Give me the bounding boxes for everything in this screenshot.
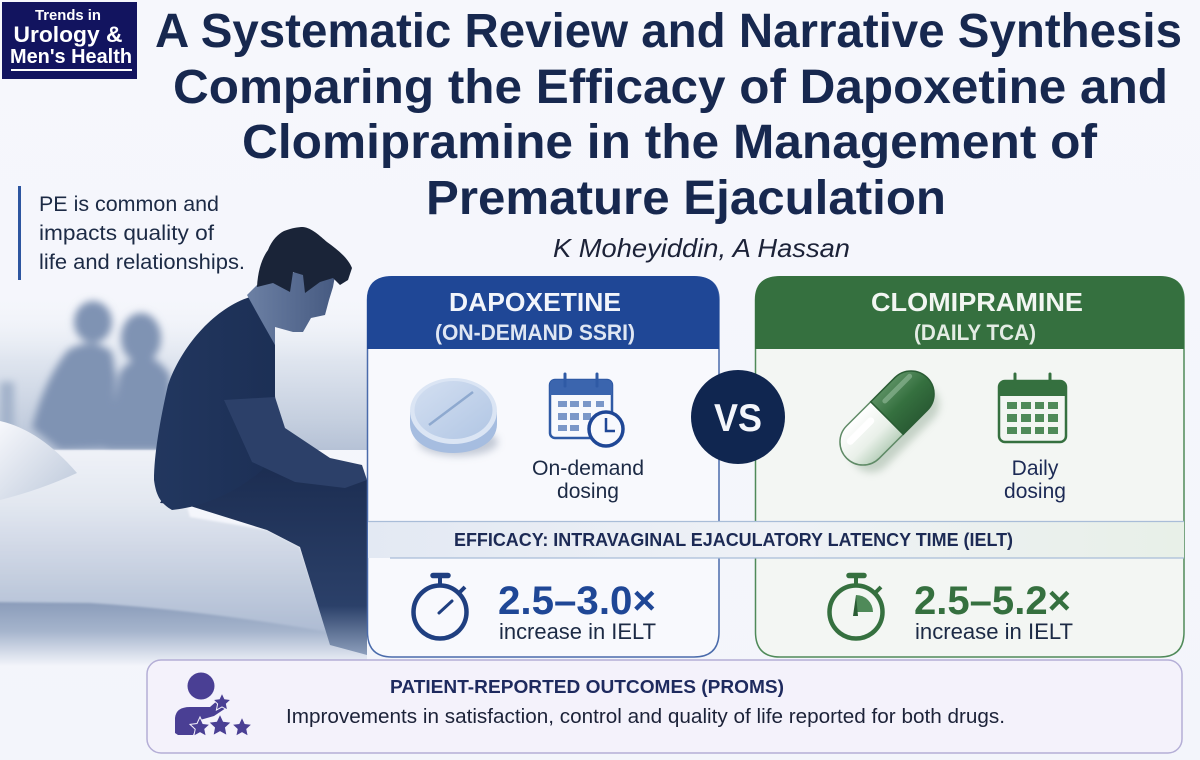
dapoxetine efficacy result — [414, 576, 656, 644]
title: Comparing the Efficacy of Dapoxetine and — [173, 61, 1168, 114]
header: dapoxetine — [367, 276, 719, 349]
label: daily dosing: dosing — [1004, 480, 1066, 503]
panel: patient-reported outcomes: Improvements in satisfaction, control and quality of life reported for both drugs. — [286, 706, 1005, 728]
vs badge: VS — [714, 397, 762, 440]
clomipramine efficacy result: 2.5–5.2× — [914, 579, 1071, 623]
efficacy band: EFFICACY: INTRAVAGINAL EJACULATORY LATENCY TIME (IELT) — [454, 530, 1013, 550]
callout: PE impact: impacts quality of — [39, 221, 214, 245]
authors: K Moheyiddin, A Hassan — [553, 233, 850, 263]
label: daily dosing — [1004, 457, 1066, 503]
label: on-demand dosing: dosing — [557, 480, 619, 503]
icon: person with stars — [175, 672, 252, 736]
dapoxetine efficacy result: 2.5–3.0× — [498, 579, 656, 623]
label: on-demand dosing: On-demand — [532, 457, 644, 480]
photo: man sitting on bed with blurred couple behind — [0, 227, 367, 666]
label: on-demand dosing — [532, 457, 644, 503]
efficacy band — [368, 522, 1184, 558]
icon: capsule — [830, 361, 948, 481]
panel: patient-reported outcomes: PATIENT-REPORTED OUTCOMES (PROMS) — [390, 677, 784, 697]
logo: Trends in — [35, 7, 101, 24]
icon: stopwatch blue — [414, 576, 466, 638]
panel: dapoxetine — [367, 276, 719, 657]
clomipramine efficacy result — [830, 576, 1073, 644]
man — [154, 227, 367, 655]
header: clomipramine: (DAILY TCA) — [914, 320, 1036, 345]
icon: calendar with clock — [550, 374, 623, 446]
header: dapoxetine: DAPOXETINE — [449, 287, 621, 317]
dapoxetine efficacy result: increase in IELT — [499, 619, 656, 644]
pillow — [0, 421, 77, 500]
header: clomipramine — [755, 276, 1184, 349]
callout: PE impact: PE is common and — [39, 192, 219, 216]
title: Clomipramine in the Management of — [242, 116, 1098, 169]
panel: clomipramine — [755, 276, 1184, 657]
icon: tablet — [410, 378, 498, 456]
clomipramine efficacy result: increase in IELT — [915, 619, 1073, 644]
header: clomipramine: CLOMIPRAMINE — [871, 287, 1083, 317]
title: Premature Ejaculation — [426, 172, 946, 225]
panel: patient-reported outcomes — [147, 660, 1182, 753]
callout: PE impact — [18, 186, 245, 280]
logo: Urology & — [14, 22, 123, 47]
callout: PE impact: life and relationships. — [39, 250, 245, 274]
icon: calendar — [999, 374, 1066, 442]
vs badge — [691, 370, 785, 464]
icon: stopwatch green — [830, 576, 882, 638]
bed — [0, 450, 367, 666]
logo — [2, 2, 137, 79]
title: A Systematic Review and Narrative Synthesis — [155, 5, 1182, 58]
label: daily dosing: Daily — [1012, 457, 1059, 480]
blurred couple in background — [0, 301, 173, 450]
title — [155, 5, 1182, 225]
logo: Men's Health — [10, 45, 132, 68]
header: dapoxetine: (ON-DEMAND SSRI) — [435, 320, 635, 345]
